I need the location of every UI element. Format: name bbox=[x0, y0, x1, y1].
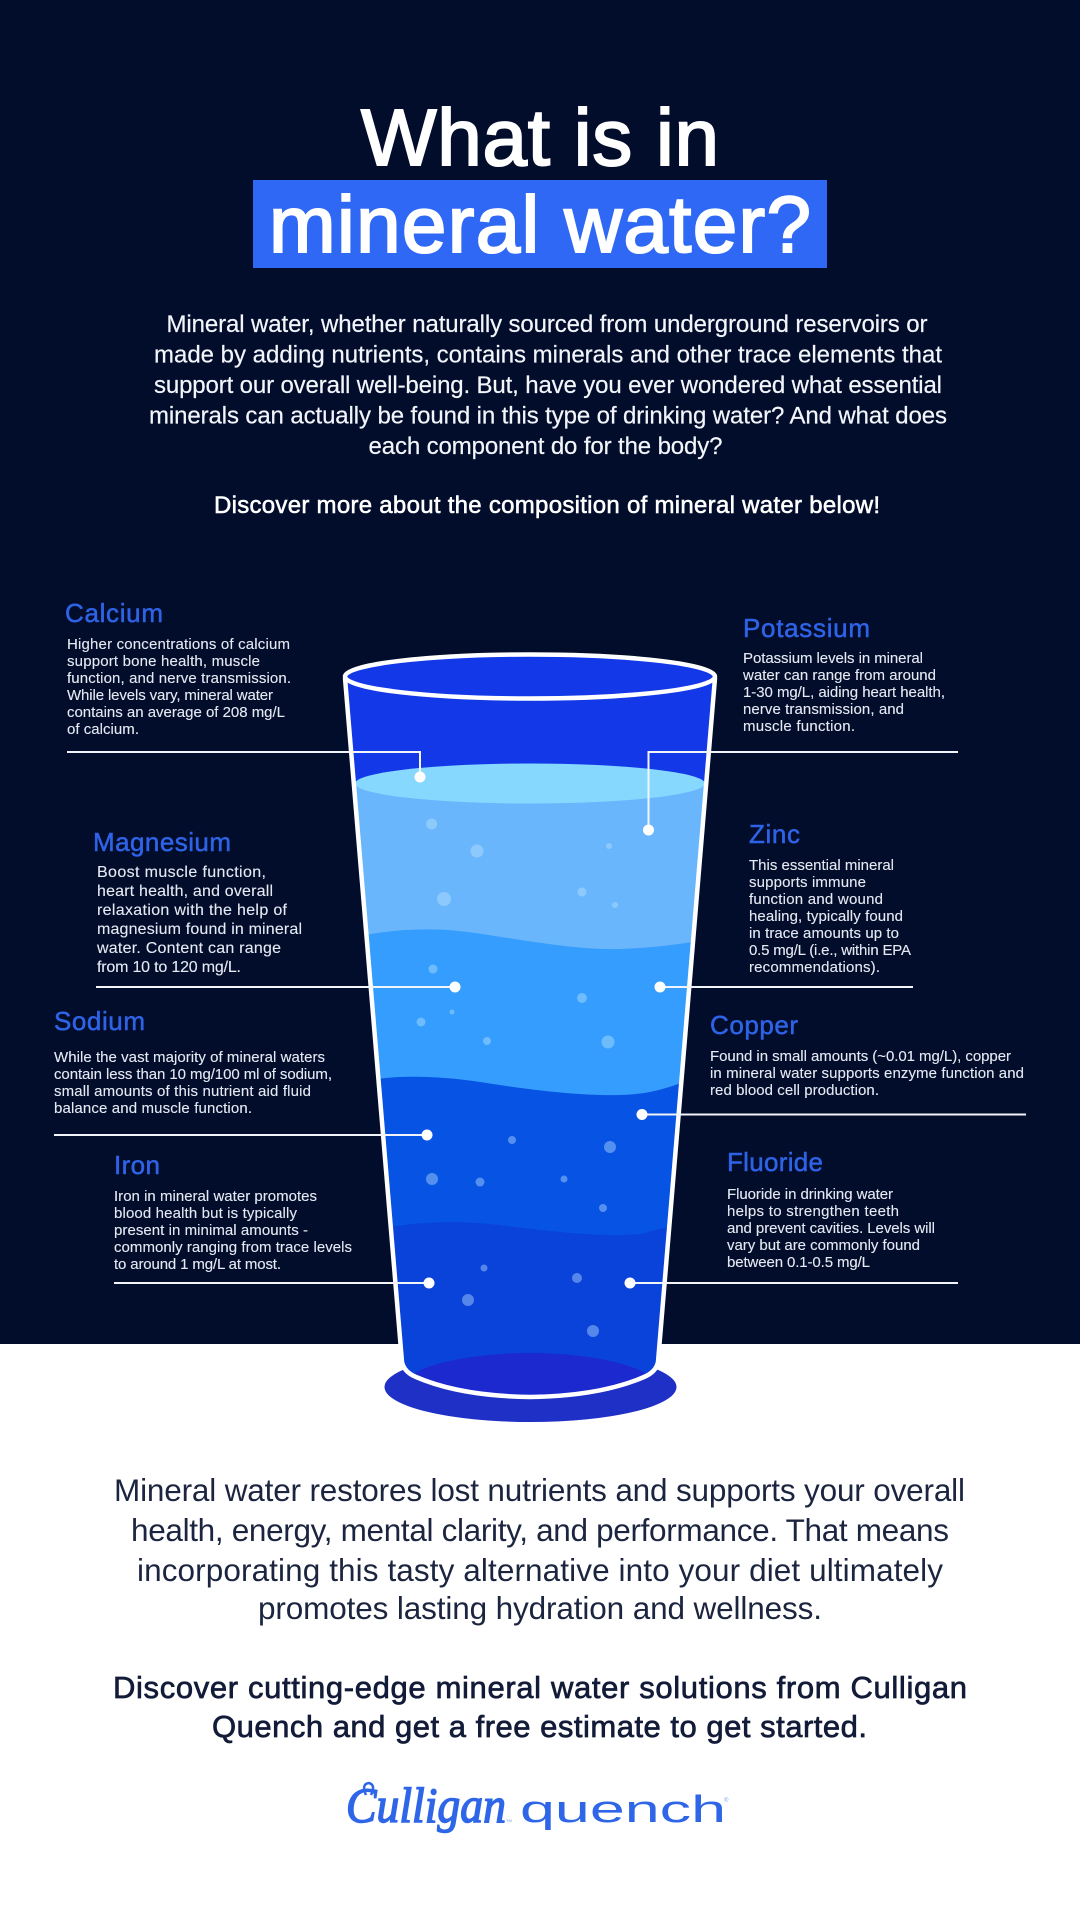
closing call to action: Quench and get a free estimate to get started. bbox=[212, 1709, 867, 1744]
callout: calcium bbox=[65, 598, 426, 782]
logo: Culligan quench bbox=[346, 1777, 729, 1833]
callout: potassium: nerve transmission, and bbox=[743, 701, 904, 718]
callout: fluoride: between 0.1-0.5 mg/L bbox=[727, 1254, 870, 1271]
callout: sodium: contain less than 10 mg/100 ml of sodium, bbox=[54, 1066, 332, 1083]
dark header background bbox=[0, 0, 1080, 1344]
intro paragraph: Mineral water, whether naturally sourced from underground reservoirs or bbox=[166, 311, 928, 338]
closing paragraph: incorporating this tasty alternative into your diet ultimately bbox=[137, 1552, 943, 1588]
callout: potassium bbox=[643, 613, 958, 836]
bubbles bbox=[416, 818, 618, 1337]
intro paragraph: made by adding nutrients, contains minerals and other trace elements that bbox=[154, 342, 942, 368]
callout: potassium: muscle function. bbox=[743, 718, 855, 735]
glass illustration bbox=[330, 654, 730, 1427]
callout: sodium: Sodium bbox=[54, 1006, 145, 1036]
callout: potassium: water can range from around bbox=[742, 667, 936, 684]
callout: calcium: While levels vary, mineral water bbox=[67, 687, 273, 704]
callout: sodium: While the vast majority of mineral waters bbox=[54, 1049, 325, 1066]
callout: magnesium: water. Content can range bbox=[96, 940, 281, 957]
title bbox=[253, 93, 827, 269]
callout: zinc: healing, typically found bbox=[749, 908, 903, 925]
logo: Culligan quench: ® bbox=[724, 1797, 729, 1804]
callout: copper: red blood cell production. bbox=[710, 1082, 879, 1099]
callout: sodium: small amounts of this nutrient aid fluid bbox=[54, 1083, 311, 1100]
intro paragraph: support our overall well-being. But, have you ever wondered what essential bbox=[154, 372, 942, 399]
callout: fluoride bbox=[624, 1147, 958, 1288]
callout: potassium: Potassium levels in mineral bbox=[743, 650, 923, 667]
callout: zinc: supports immune bbox=[749, 874, 866, 891]
callout: calcium: Higher concentrations of calcium bbox=[67, 636, 290, 653]
callout: sodium bbox=[54, 1006, 432, 1140]
callout: magnesium: Boost muscle function, bbox=[97, 864, 266, 881]
water layers bbox=[348, 682, 712, 1394]
callout: copper bbox=[636, 1010, 1026, 1120]
callout: magnesium: relaxation with the help of bbox=[97, 902, 288, 919]
callout: fluoride: Fluoride bbox=[727, 1147, 823, 1177]
title: What is in bbox=[361, 93, 719, 182]
logo: Culligan quench: TM bbox=[506, 1818, 512, 1823]
callout: potassium: 1-30 mg/L, aiding heart health, bbox=[743, 684, 945, 701]
callout: copper: Copper bbox=[710, 1010, 798, 1040]
callout: zinc: recommendations). bbox=[749, 959, 880, 976]
closing paragraph: Mineral water restores lost nutrients and supports your overall bbox=[114, 1472, 965, 1508]
callout: iron: Iron in mineral water promotes bbox=[114, 1188, 317, 1205]
callout: copper: Found in small amounts (~0.01 mg/L), copper bbox=[710, 1048, 1011, 1065]
callout: calcium: support bone health, muscle bbox=[67, 653, 260, 670]
closing paragraph: health, energy, mental clarity, and performance. That means bbox=[131, 1512, 949, 1548]
closing call to action bbox=[113, 1670, 967, 1744]
callout: sodium: balance and muscle function. bbox=[54, 1100, 252, 1117]
callout: potassium: Potassium bbox=[743, 613, 870, 643]
callout: iron: present in minimal amounts - bbox=[114, 1222, 308, 1239]
callout: magnesium bbox=[93, 827, 460, 992]
callout: magnesium: magnesium found in mineral bbox=[97, 921, 302, 938]
callout: magnesium: heart health, and overall bbox=[97, 883, 273, 900]
intro call to action: Discover more about the composition of mineral water below! bbox=[214, 492, 880, 519]
logo: Culligan quench: Culligan bbox=[346, 1777, 506, 1833]
intro paragraph: each component do for the body? bbox=[368, 433, 722, 460]
callout: iron: to around 1 mg/L at most. bbox=[114, 1256, 281, 1273]
callout: calcium: Calcium bbox=[65, 598, 163, 628]
callout: iron: commonly ranging from trace levels bbox=[114, 1239, 352, 1256]
callout: zinc: This essential mineral bbox=[749, 857, 894, 874]
callout: zinc: 0.5 mg/L (i.e., within EPA bbox=[749, 942, 911, 959]
logo: Culligan quench: quench bbox=[520, 1789, 726, 1831]
callout: zinc: function and wound bbox=[749, 891, 883, 908]
callout: iron: Iron bbox=[114, 1150, 160, 1180]
closing paragraph bbox=[114, 1472, 965, 1626]
glass base shadow bbox=[384, 1352, 676, 1422]
title highlight: mineral water?: mineral water? bbox=[269, 180, 811, 269]
callout: magnesium: Magnesium bbox=[93, 827, 231, 857]
callout: zinc: in trace amounts up to bbox=[749, 925, 899, 942]
callout: fluoride: Fluoride in drinking water bbox=[727, 1186, 893, 1203]
callout: zinc: Zinc bbox=[749, 819, 800, 849]
callout: iron bbox=[114, 1150, 434, 1288]
intro paragraph bbox=[149, 311, 947, 460]
callout: zinc bbox=[654, 819, 913, 992]
callout: fluoride: vary but are commonly found bbox=[727, 1237, 920, 1254]
callout: fluoride: and prevent cavities. Levels will bbox=[727, 1220, 935, 1237]
callout: iron: blood health but is typically bbox=[114, 1205, 298, 1222]
closing call to action: Discover cutting-edge mineral water solutions from Culligan bbox=[113, 1670, 967, 1705]
callout: calcium: of calcium. bbox=[67, 721, 139, 738]
callout: calcium: contains an average of 208 mg/L bbox=[67, 704, 285, 721]
intro paragraph: minerals can actually be found in this type of drinking water? And what does bbox=[149, 402, 947, 430]
closing paragraph: promotes lasting hydration and wellness. bbox=[258, 1590, 822, 1626]
callout: copper: in mineral water supports enzyme function and bbox=[710, 1065, 1024, 1082]
glass rim bbox=[345, 654, 715, 698]
callout: magnesium: from 10 to 120 mg/L. bbox=[97, 959, 241, 976]
callout: calcium: function, and nerve transmission. bbox=[67, 670, 291, 687]
callout: fluoride: helps to strengthen teeth bbox=[727, 1203, 899, 1220]
glass outline bbox=[345, 678, 715, 1397]
